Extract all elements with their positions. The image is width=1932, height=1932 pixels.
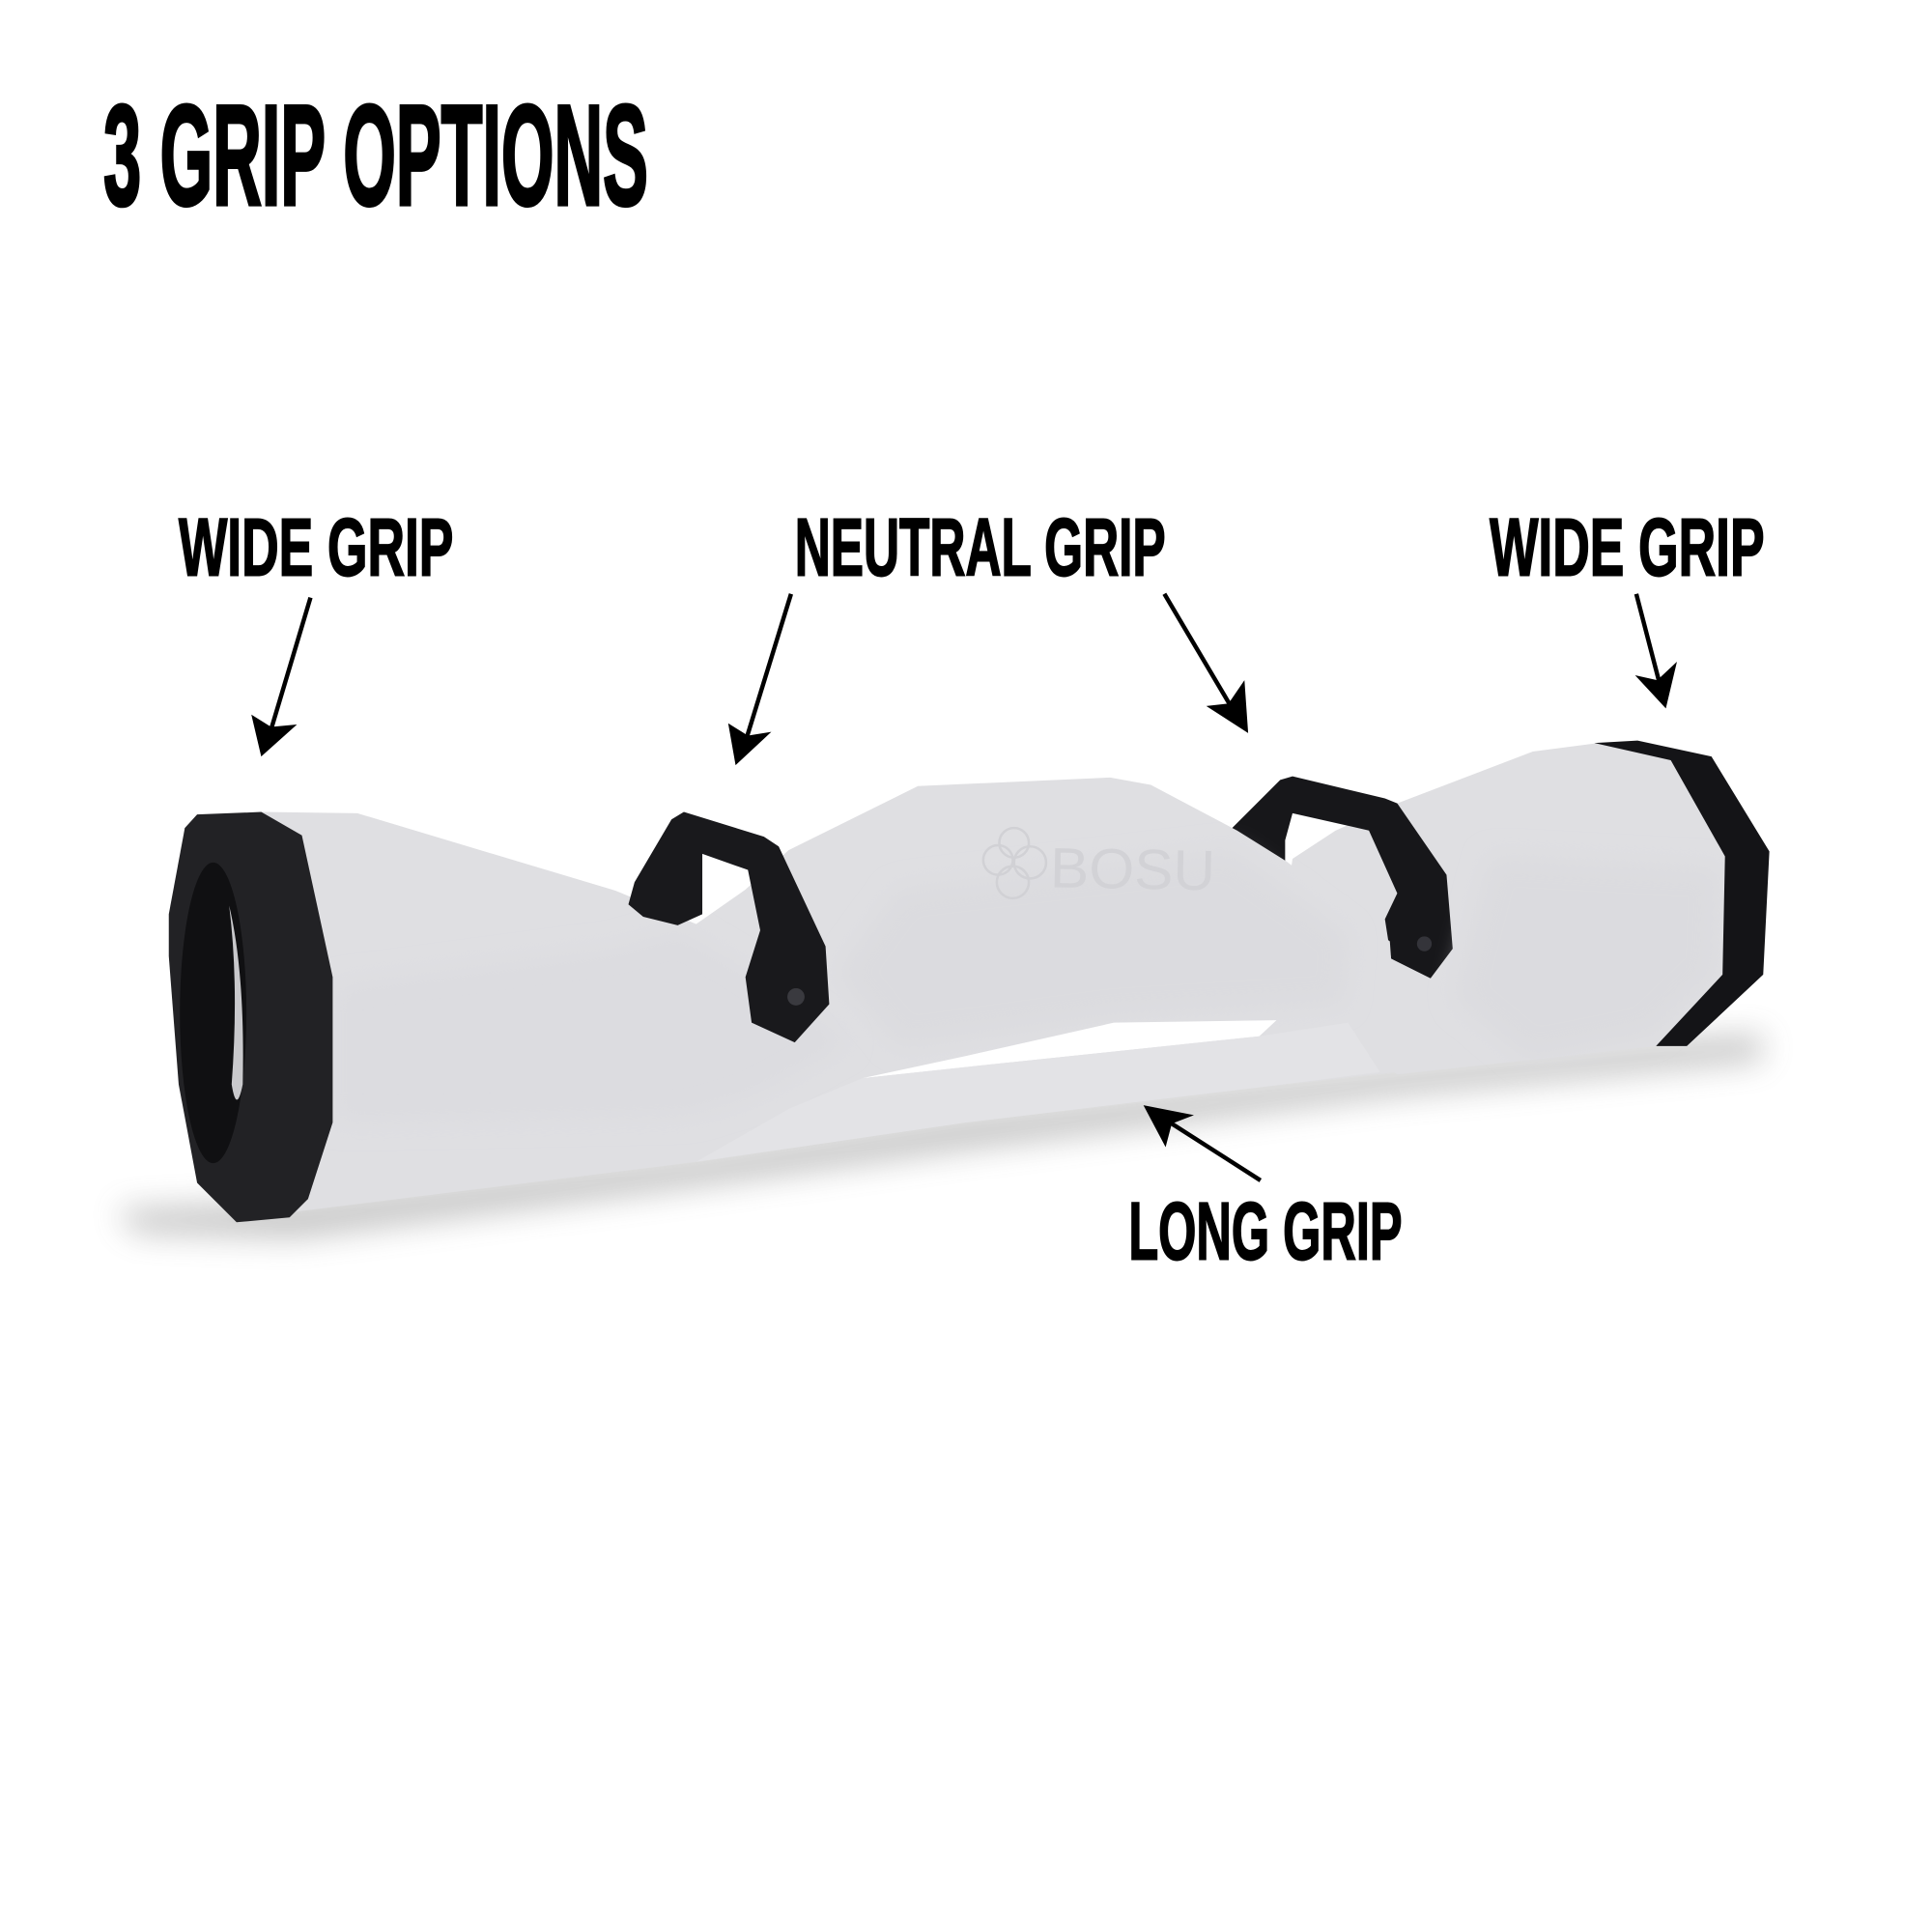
- brand mark: BOSU: [1050, 837, 1216, 902]
- gap between body and long grip: [863, 1020, 1276, 1078]
- arrow: wide grip left: [251, 598, 310, 756]
- label: wide grip left: WIDE GRIP: [179, 502, 453, 593]
- inner light sliver: [229, 906, 243, 1099]
- bulb facet: [1454, 856, 1719, 1060]
- label: long grip: LONG GRIP: [1128, 1186, 1403, 1277]
- rivet: [1417, 936, 1432, 952]
- text: 3 GRIP OPTIONS: [103, 76, 648, 236]
- label: wide grip right: WIDE GRIP: [1490, 502, 1765, 593]
- back neutral handle: [1233, 777, 1453, 979]
- arrow: long grip: [1144, 1105, 1261, 1180]
- centre section, left body and long grip: [261, 778, 1479, 1212]
- product: Bosu weight bar: [117, 741, 1770, 1237]
- arrow: neutral grip left: [728, 594, 791, 765]
- arrow: neutral grip right: [1164, 594, 1248, 733]
- wide grip collar right: [1595, 741, 1770, 1046]
- brand mark: [983, 828, 1216, 902]
- opening of collar: [180, 863, 246, 1163]
- rivet: [787, 988, 805, 1006]
- long grip highlight: [696, 1023, 1380, 1162]
- wide grip collar left: [169, 812, 332, 1222]
- facet shading: [335, 930, 850, 1122]
- floor shadow: [117, 1035, 1762, 1237]
- centre facet: [838, 850, 1350, 1047]
- arrow: wide grip right: [1635, 594, 1677, 708]
- label: neutral grip: NEUTRAL GRIP: [795, 502, 1166, 593]
- back bulb: [1282, 743, 1730, 1074]
- front neutral handle: [629, 812, 829, 1042]
